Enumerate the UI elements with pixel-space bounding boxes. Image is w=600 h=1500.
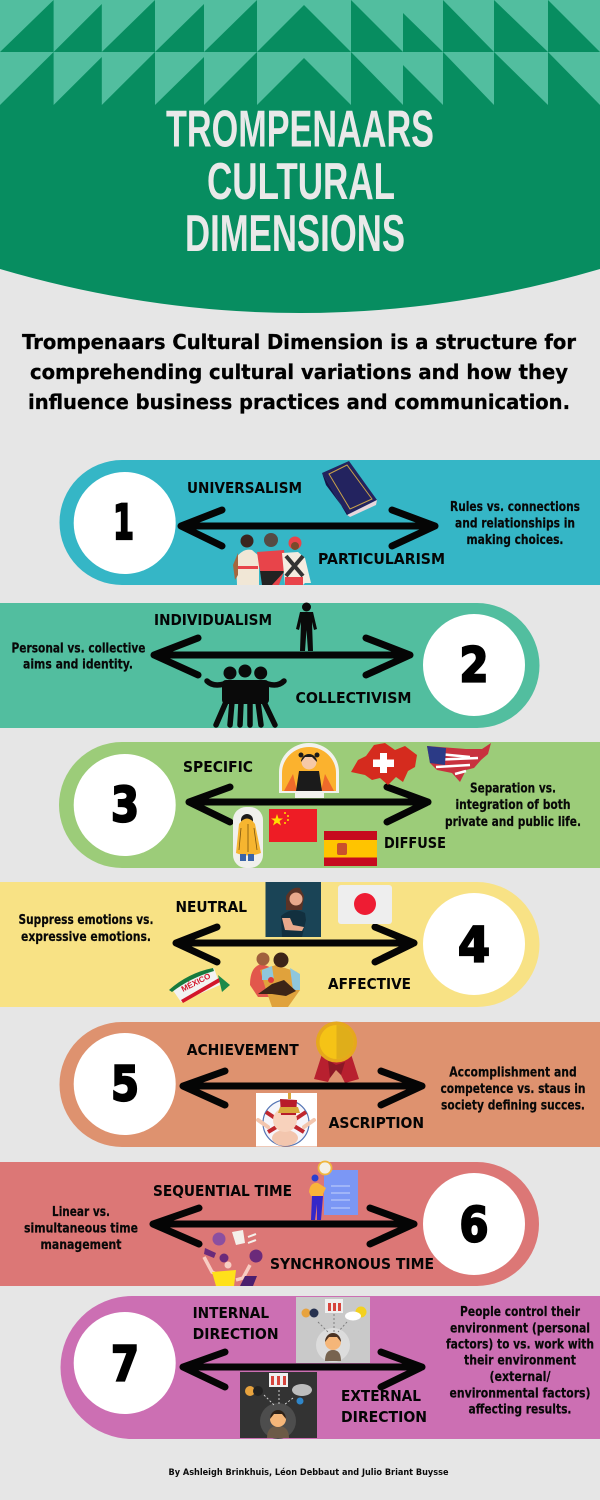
icon: law book (322, 461, 377, 517)
label: neutral: NEUTRAL (176, 898, 247, 916)
description: aims and identity. (23, 658, 133, 672)
description (440, 1066, 586, 1114)
icon: switzerland map (351, 743, 417, 785)
description (24, 1205, 138, 1253)
header banner (0, 0, 600, 313)
intro text: influence business practices and communication. (28, 390, 570, 414)
label: particularism: PARTICULARISM (318, 550, 445, 568)
arrow (154, 638, 410, 675)
icon: japan flag (338, 885, 392, 924)
title (166, 100, 434, 263)
panel: dimension 1 universalism vs particularism (60, 460, 600, 585)
icon: internal direction image (296, 1297, 370, 1363)
number 6: 6 (460, 1198, 488, 1254)
icon: spain flag (324, 831, 377, 866)
label: individualism: INDIVIDUALISM (154, 611, 272, 629)
arrow (153, 1208, 414, 1244)
panel: dimension 6 sequential vs synchronous time (0, 1162, 539, 1286)
number 1: 1 (113, 495, 134, 551)
triangle pattern (0, 0, 600, 105)
intro text: Trompenaars Cultural Dimension is a structure for (22, 330, 576, 354)
title: CULTURAL (207, 153, 395, 211)
label: affective: AFFECTIVE (328, 975, 411, 993)
icon: china flag (269, 809, 317, 842)
intro text (22, 330, 576, 414)
description (450, 500, 580, 548)
description: Accomplishment and (449, 1066, 577, 1080)
icon: usa flag map (427, 743, 491, 782)
label: internal direction: DIRECTION (193, 1325, 279, 1343)
description: simultaneous time (24, 1222, 138, 1236)
description (18, 913, 154, 945)
label: external direction (341, 1387, 427, 1426)
label: achievement: ACHIEVEMENT (187, 1041, 299, 1059)
icon: three people in traditional dress (233, 533, 311, 585)
panel: dimension 3 specific vs diffuse (59, 742, 600, 868)
number 4: 4 (458, 918, 490, 974)
icon: viva mexico banner: MÉXICO (180, 971, 212, 994)
intro text: comprehending cultural variations and how they (30, 360, 568, 384)
description (446, 1305, 594, 1418)
number 2: 2 (460, 638, 488, 694)
arrow (183, 1352, 422, 1387)
number 5: 5 (111, 1056, 139, 1112)
description: Suppress emotions vs. (18, 913, 154, 928)
icon: woman with mask (266, 882, 321, 937)
label: diffuse: DIFFUSE (384, 834, 446, 852)
description: their environment (464, 1354, 576, 1368)
description: making choices. (466, 533, 564, 548)
icon: group of three people (207, 664, 284, 725)
description: integration of both (456, 798, 570, 813)
description: expressive emotions. (21, 930, 151, 945)
icon: external direction image (240, 1372, 317, 1439)
icon: gold medal (314, 1022, 359, 1083)
number 3: 3 (111, 778, 139, 834)
description: Personal vs. collective (12, 642, 146, 656)
panel: dimension 7 internal vs external direction (60, 1296, 600, 1439)
title: DIMENSIONS (185, 205, 405, 263)
label: internal direction: INTERNAL (193, 1304, 269, 1322)
icon: person with checklist and clock (309, 1162, 358, 1220)
label: internal direction (193, 1304, 279, 1343)
description: (external/ (490, 1370, 551, 1385)
arrow (181, 510, 435, 546)
label: ascription: ASCRIPTION (329, 1114, 424, 1132)
description: affecting results. (468, 1402, 572, 1418)
icon: viva mexico banner (169, 968, 230, 1003)
panel: dimension 2 individualism vs collectivism (0, 602, 540, 728)
number 7: 7 (111, 1336, 139, 1392)
description (445, 782, 581, 830)
icon: royal baby (256, 1093, 317, 1146)
label: synchronous time: SYNCHRONOUS TIME (270, 1255, 434, 1273)
arrow (176, 927, 414, 962)
description: and relationships in (455, 516, 575, 532)
description: management (40, 1238, 122, 1253)
description: Linear vs. (52, 1205, 110, 1220)
icon: extrovert sticker (279, 743, 339, 798)
icon: multitasking woman (204, 1230, 262, 1286)
label: specific: SPECIFIC (183, 758, 253, 776)
label: universalism: UNIVERSALISM (187, 479, 302, 497)
label: external direction: EXTERNAL (341, 1387, 421, 1405)
title: TROMPENAARS (166, 100, 434, 158)
panel: dimension 5 achievement vs ascription (60, 1022, 600, 1147)
icon: introvert sticker (233, 807, 263, 868)
label: collectivism: COLLECTIVISM (296, 689, 412, 707)
label: external direction: DIRECTION (341, 1408, 427, 1426)
label: sequential time: SEQUENTIAL TIME (153, 1182, 292, 1200)
arrow (183, 1071, 422, 1105)
description: Separation vs. (470, 782, 556, 796)
panel: dimension 4 neutral vs affective (0, 882, 540, 1007)
description (12, 642, 146, 672)
icon: single person (296, 602, 317, 651)
footer credit: By Ashleigh Brinkhuis, Léon Debbaut and Julio Briant Buysse (168, 1467, 448, 1478)
arrow (189, 787, 428, 822)
icon: couple embracing (250, 952, 300, 1007)
